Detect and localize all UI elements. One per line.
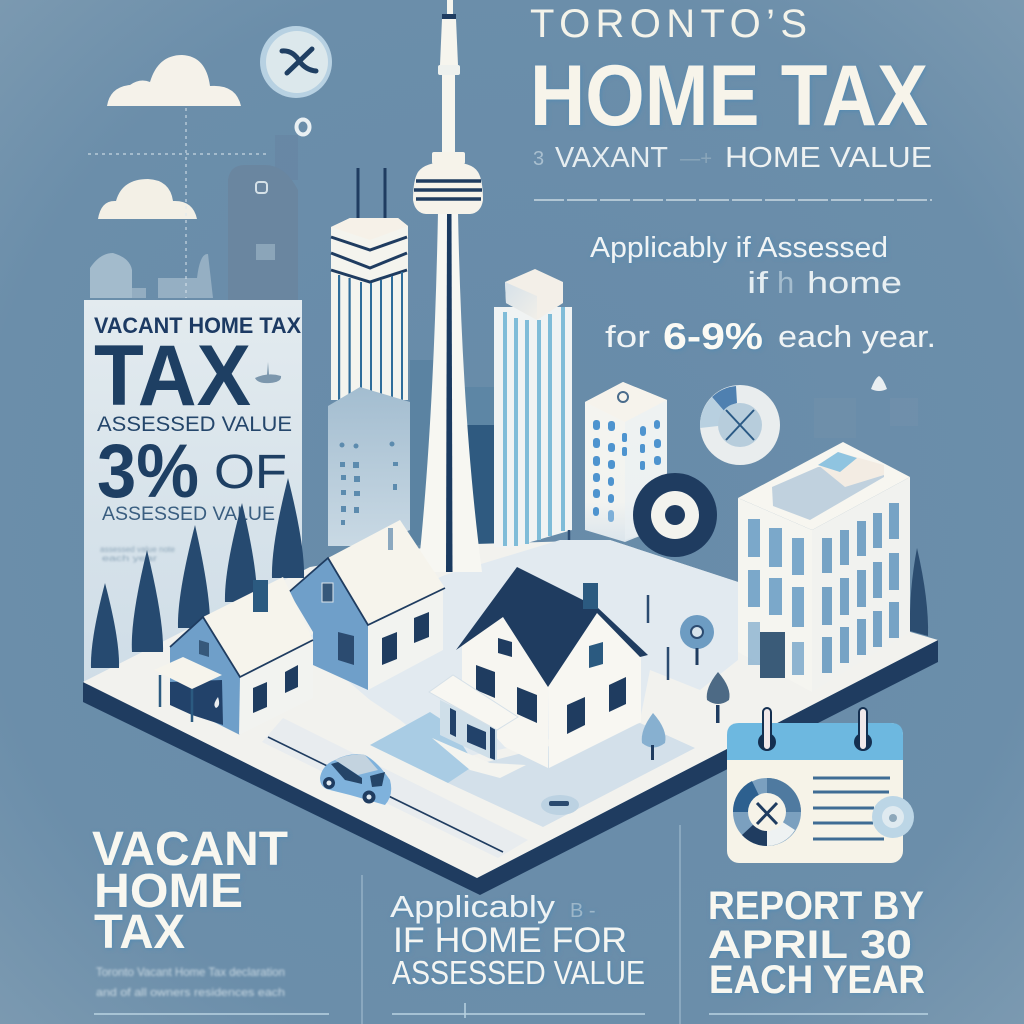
faint skyline right	[814, 398, 918, 438]
description line 3 start: for	[605, 319, 650, 354]
column 1 heading line 1: VACANT	[92, 823, 288, 876]
subtitle faint numeral: 3	[533, 148, 544, 170]
column dividers	[362, 825, 680, 1024]
panel footer label: ASSESSED VALUE	[102, 504, 275, 525]
column 3 line 2: APRIL 30	[708, 923, 912, 967]
trees: left row	[91, 478, 304, 668]
panel blurred note: each year	[102, 554, 158, 563]
column 1 heading line 3: TAX	[94, 906, 185, 959]
icon: pie badge	[700, 385, 780, 465]
subtitle faint dash: —+	[680, 148, 712, 170]
calendar badge	[872, 796, 914, 838]
column 1 blurred small text	[96, 965, 285, 999]
upper ground	[300, 540, 738, 760]
parked car marker	[541, 795, 579, 815]
panel sub label: ASSESSED VALUE	[97, 413, 292, 436]
calendar dial	[733, 778, 801, 846]
rooftop unit	[772, 452, 884, 520]
panel blurred note	[100, 545, 176, 563]
house: large centre	[429, 567, 648, 778]
icon: small cloud	[98, 179, 197, 219]
office door	[760, 632, 785, 678]
description line 3 end: each year.	[778, 319, 936, 354]
icon: large cloud	[107, 55, 241, 106]
building: large office	[738, 442, 910, 692]
building: striped tower left	[331, 168, 408, 400]
left poster panel	[84, 300, 302, 685]
title: Home Tax: HOME TAX	[530, 48, 928, 144]
dashed guide lines	[88, 108, 270, 298]
street posts	[569, 530, 668, 680]
description line 1: Applicably if Assessed	[590, 232, 888, 264]
column 2 line 2: IF HOME FOR	[393, 921, 627, 960]
platform	[83, 540, 938, 895]
panel small mark	[255, 362, 281, 383]
panel percentage: 3%	[97, 429, 199, 514]
column 1 blurred small text: Toronto Vacant Home Tax declaration	[96, 965, 285, 979]
column 3 line 1: REPORT BY	[708, 884, 924, 928]
bottom column 3	[708, 884, 925, 1002]
calendar lines	[813, 778, 890, 839]
icon: faint triangle marker	[871, 376, 887, 391]
house: left	[154, 577, 313, 735]
blue lawn	[370, 712, 475, 783]
calendar icon	[727, 708, 914, 863]
porch	[429, 675, 526, 778]
column 2 faint mark: B -	[570, 900, 596, 922]
calendar rings	[758, 708, 872, 751]
subtitle rule	[534, 199, 932, 201]
panel heading: VACANT HOME TAX	[94, 313, 301, 338]
panel OF: OF	[214, 446, 287, 499]
subtitle left: VAXANT	[555, 142, 668, 174]
icon: percent badge	[260, 26, 332, 98]
column 2 line 3: ASSESSED VALUE	[392, 954, 645, 991]
road band	[262, 718, 528, 858]
description line 2 if: if	[747, 265, 769, 300]
lamp badge	[680, 615, 714, 665]
description percentage: 6-9%	[663, 316, 763, 357]
building: small blue-window block	[585, 382, 667, 542]
description text	[590, 232, 936, 357]
road line	[268, 737, 503, 852]
column 3 rule	[709, 1013, 928, 1015]
column 1 heading line 2: HOME	[94, 865, 243, 918]
description line 2 home: home	[807, 265, 902, 300]
office windows left	[748, 519, 804, 675]
icon: small ring	[296, 120, 310, 134]
column 1 rule	[94, 1013, 329, 1015]
light lawn	[448, 723, 695, 827]
panel big word: TAX	[94, 328, 251, 424]
faded skyline background	[90, 135, 298, 300]
column 1 blurred small text: and of all owners residences each	[96, 987, 285, 999]
tree: right side	[910, 548, 928, 636]
bottom column 1	[92, 823, 288, 959]
building: faded tower	[328, 387, 410, 546]
column 2 rule	[392, 1003, 645, 1018]
building: striped tower right	[494, 269, 572, 548]
title: Toronto's: TORONTO’S	[530, 2, 807, 46]
title block	[530, 2, 932, 200]
column 3 line 3: EACH YEAR	[709, 958, 925, 1002]
tree: dark round	[707, 672, 730, 723]
house: middle	[289, 520, 445, 690]
column 2 line 1: Applicably	[390, 889, 556, 924]
bottom column 2	[390, 889, 645, 991]
panel blurred note: assessed value note	[100, 545, 176, 554]
CN Tower	[413, 0, 483, 572]
description line 2 faint h: h	[777, 265, 794, 300]
icon: target	[633, 473, 717, 557]
tree: small light	[642, 713, 666, 760]
subtitle right: HOME VALUE	[725, 142, 932, 174]
car	[320, 754, 391, 805]
dark backdrop behind tower	[410, 360, 494, 547]
office windows right	[822, 503, 899, 673]
